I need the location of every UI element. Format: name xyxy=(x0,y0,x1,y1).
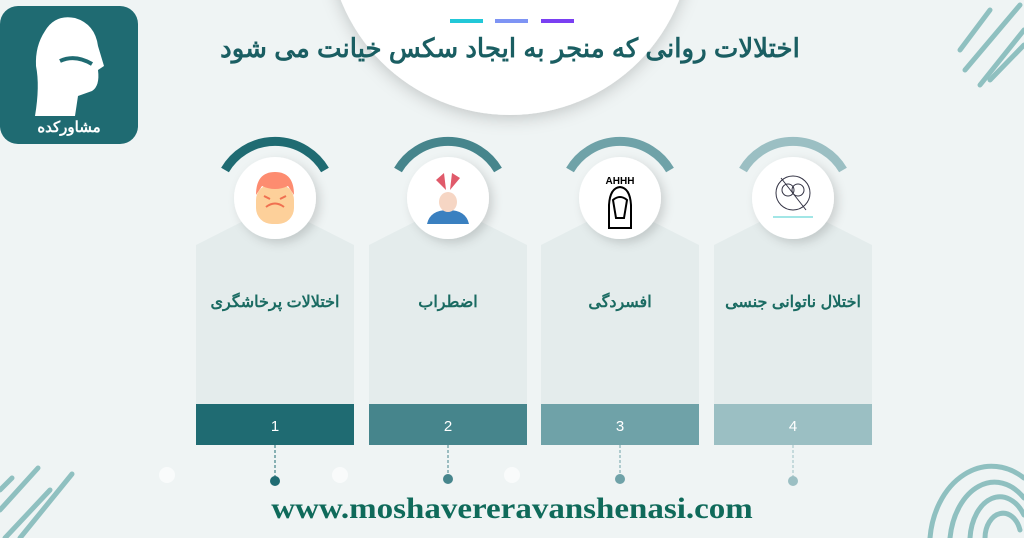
column 2: 2 xyxy=(444,418,452,435)
logo: مشاورکده xyxy=(37,119,101,136)
icon: anxiety xyxy=(427,173,469,224)
text: افسردگی xyxy=(588,294,652,311)
column 3 xyxy=(541,141,699,484)
accent bars xyxy=(450,19,483,23)
column 4 xyxy=(714,141,872,486)
big white circle xyxy=(328,0,692,115)
icon: gender symbols crossed xyxy=(773,176,813,217)
text: اختلال ناتوانی جنسی xyxy=(725,294,861,311)
column 3: 3 xyxy=(616,418,624,435)
logo xyxy=(0,6,138,144)
column 1: 1 xyxy=(271,418,279,435)
website: www.moshavereravanshenasi.com xyxy=(271,492,753,525)
column 2 xyxy=(369,141,527,484)
text: اضطراب xyxy=(418,294,478,311)
icon: depression xyxy=(606,176,634,228)
title: اختلالات روانی که منجر به ایجاد سکس خیانت می شود xyxy=(220,33,800,63)
faint dots xyxy=(159,467,520,483)
labels: اختلالات پرخاشگری xyxy=(210,294,339,311)
icon: angry face xyxy=(256,172,294,224)
column 4: 4 xyxy=(789,418,797,435)
icon: depression: AHHH xyxy=(606,176,634,187)
column 1 xyxy=(196,141,354,486)
